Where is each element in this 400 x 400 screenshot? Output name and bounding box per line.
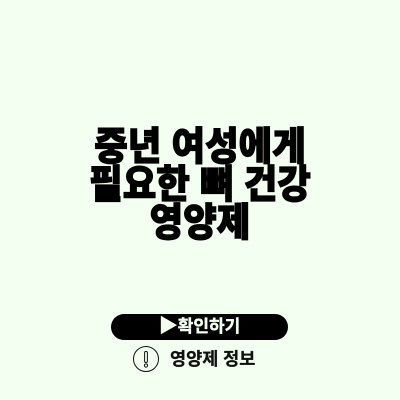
- title: [89, 124, 311, 245]
- caption: supplement info: 영양제 정보: [170, 349, 255, 369]
- title line 2: 필요한 뼈 건강: [89, 162, 311, 207]
- button: confirm: [111, 314, 288, 340]
- button: confirm: ▶확인하기: [159, 316, 240, 337]
- icon: exclamation circle: [133, 346, 159, 372]
- title line 1: 중년 여성에게: [94, 124, 306, 169]
- title line 3: 영양제: [150, 200, 250, 245]
